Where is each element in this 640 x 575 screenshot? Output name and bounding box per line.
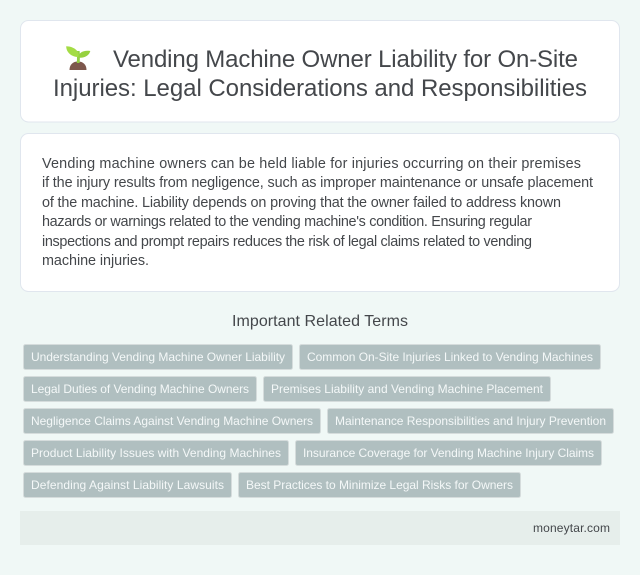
summary text: Vending machine owners can be held liable for injuries occurring on their premises [42,156,581,172]
chip [264,376,550,402]
footer [20,511,620,545]
related term chips [24,344,614,498]
chip [24,376,256,402]
summary text [42,156,593,269]
title [53,46,587,102]
summary text: if the injury results from negligence, such as improper maintenance or unsafe placement [42,175,593,191]
chip: Legal Duties of Vending Machine Owners [31,382,249,396]
summary text: inspections and prompt repairs reduces the risk of legal claims related to vending [42,234,532,250]
chip [24,344,292,370]
title: Vending Machine Owner Liability for On-Site [113,46,578,73]
chip [24,440,288,466]
chip [296,440,602,466]
icon: sprout [66,46,90,70]
chip: Negligence Claims Against Vending Machine Owners [31,414,313,428]
summary text: machine injuries. [42,253,149,269]
title: Injuries: Legal Considerations and Responsibilities [53,75,587,102]
chip: Common On-Site Injuries Linked to Vending Machines [307,350,593,364]
chip: Understanding Vending Machine Owner Liability [31,350,285,364]
heading: related terms: Important Related Terms [232,313,408,330]
chip: Product Liability Issues with Vending Machines [31,446,281,460]
chip [24,472,232,498]
chip: Best Practices to Minimize Legal Risks for Owners [246,478,513,492]
chip [238,472,520,498]
chip: Defending Against Liability Lawsuits [31,478,224,492]
chip [328,408,614,434]
chip: Maintenance Responsibilities and Injury Prevention [335,414,606,428]
chip [24,408,320,434]
chip: Premises Liability and Vending Machine Placement [271,382,544,396]
summary text: of the machine. Liability depends on proving that the owner failed to address known [42,195,561,211]
chip [300,344,600,370]
chip: Insurance Coverage for Vending Machine Injury Claims [303,446,594,460]
panel: summary [20,134,620,292]
panel: title card [20,20,620,122]
summary text: hazards or warnings related to the vending machine's condition. Ensuring regular [42,214,532,230]
footer: moneytar.com [533,521,610,535]
